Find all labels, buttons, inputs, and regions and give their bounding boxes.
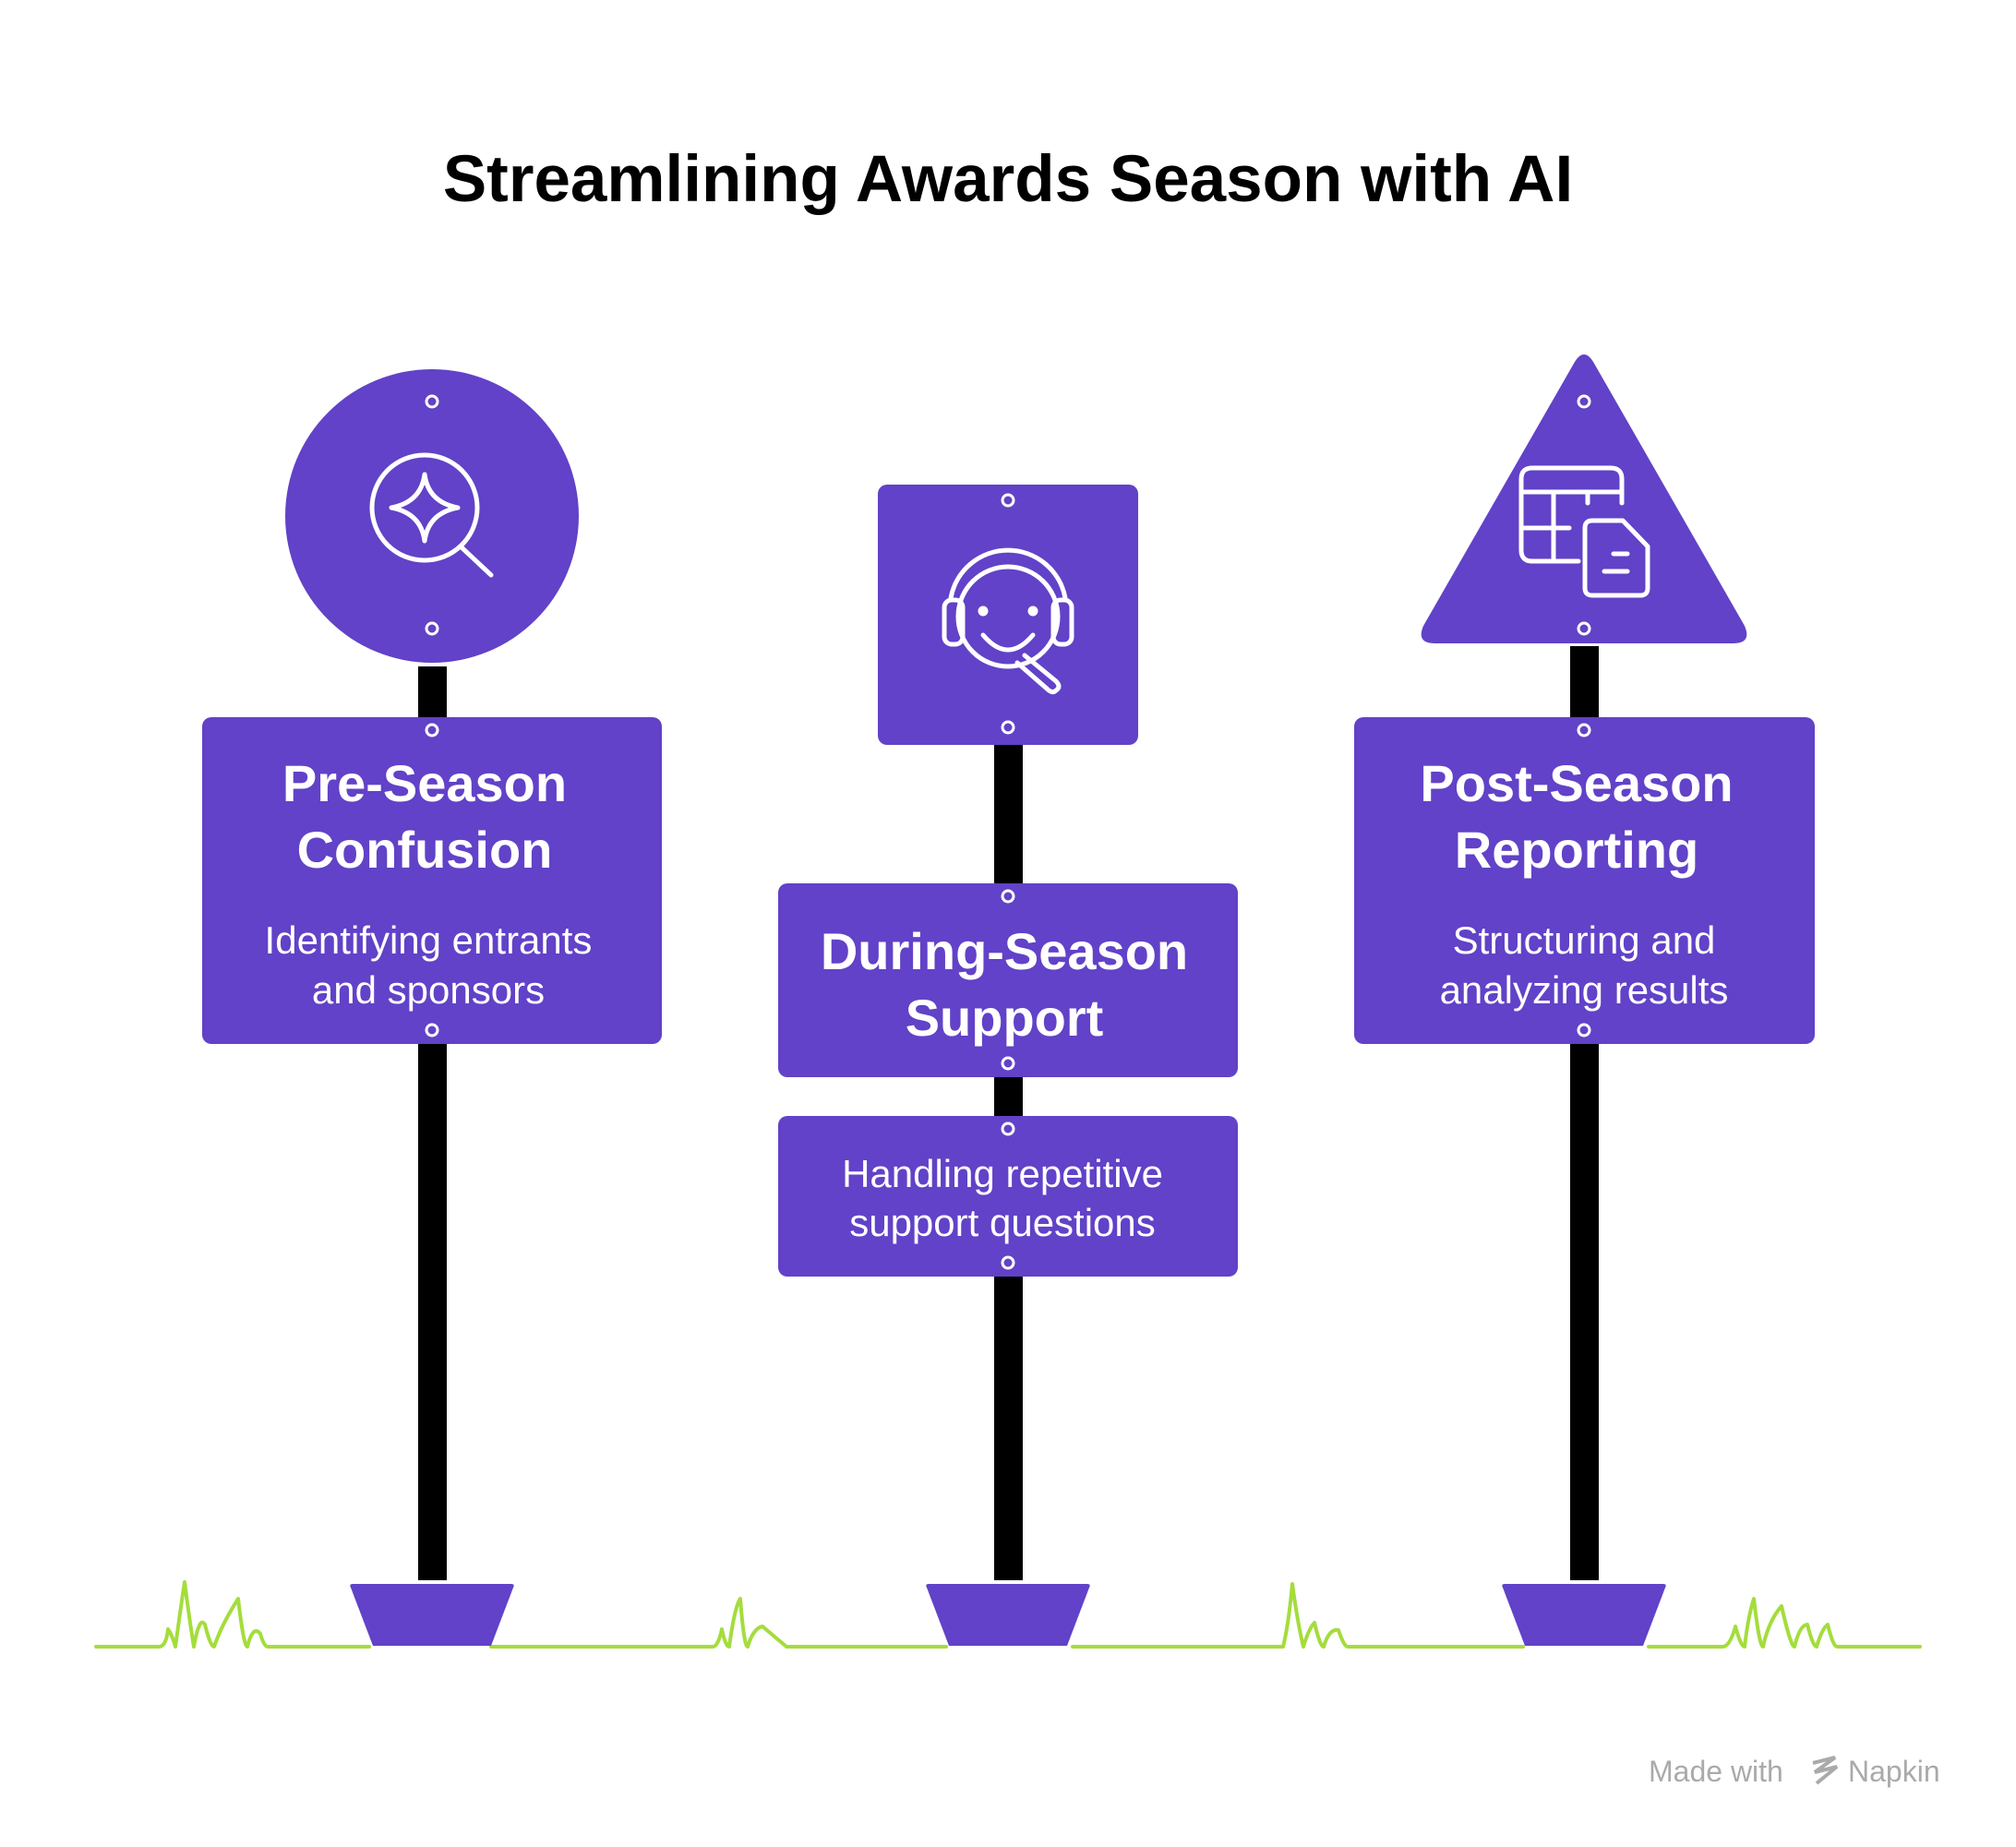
- sign: circle with search-sparkle icon: [285, 369, 579, 663]
- base: right: [1502, 1584, 1666, 1646]
- sign: middle title panel: Support: [906, 989, 1103, 1047]
- sign: left text panel: [202, 717, 662, 1044]
- sign: right text panel: Post-Season: [1420, 754, 1734, 812]
- sign: triangle with report icon: [1422, 354, 1746, 643]
- pole: middle: [994, 738, 1023, 1580]
- sign: middle description panel: Handling repetitive: [842, 1152, 1163, 1195]
- sign: middle square with support icon: [878, 485, 1138, 745]
- sign: right text panel: Structuring and: [1453, 918, 1715, 962]
- rivets: [426, 396, 1590, 1268]
- sign: left text panel: and sponsors: [312, 968, 545, 1012]
- footer: made with napkin: [1649, 1755, 1940, 1788]
- sign: middle title panel: During-Season: [821, 922, 1188, 980]
- icon: support headset: [944, 550, 1072, 692]
- footer: made with napkin: Made with: [1649, 1755, 1783, 1788]
- sign: middle description panel: [778, 1116, 1238, 1277]
- sign: middle title panel: [778, 883, 1238, 1077]
- sign: left text panel: Identifying entrants: [265, 918, 592, 962]
- footer: made with napkin: Napkin: [1848, 1755, 1940, 1788]
- sign: right text panel: analyzing results: [1440, 968, 1728, 1012]
- sign: right text panel: Reporting: [1455, 821, 1698, 879]
- icon: search sparkle: [372, 455, 491, 575]
- pole: right: [1570, 646, 1599, 1580]
- sign: right text panel: [1354, 717, 1815, 1044]
- sign: left text panel: Confusion: [297, 821, 552, 879]
- sign: left text panel: Pre-Season: [282, 754, 567, 812]
- icon: table and document: [1521, 468, 1648, 595]
- base: left: [350, 1584, 514, 1646]
- pole: left: [418, 666, 447, 1580]
- base: middle: [926, 1584, 1090, 1646]
- title: Streamlining Awards Season with AI: [443, 143, 1573, 216]
- ground with grass: [96, 1582, 1920, 1647]
- sign: middle description panel: support questions: [849, 1201, 1156, 1244]
